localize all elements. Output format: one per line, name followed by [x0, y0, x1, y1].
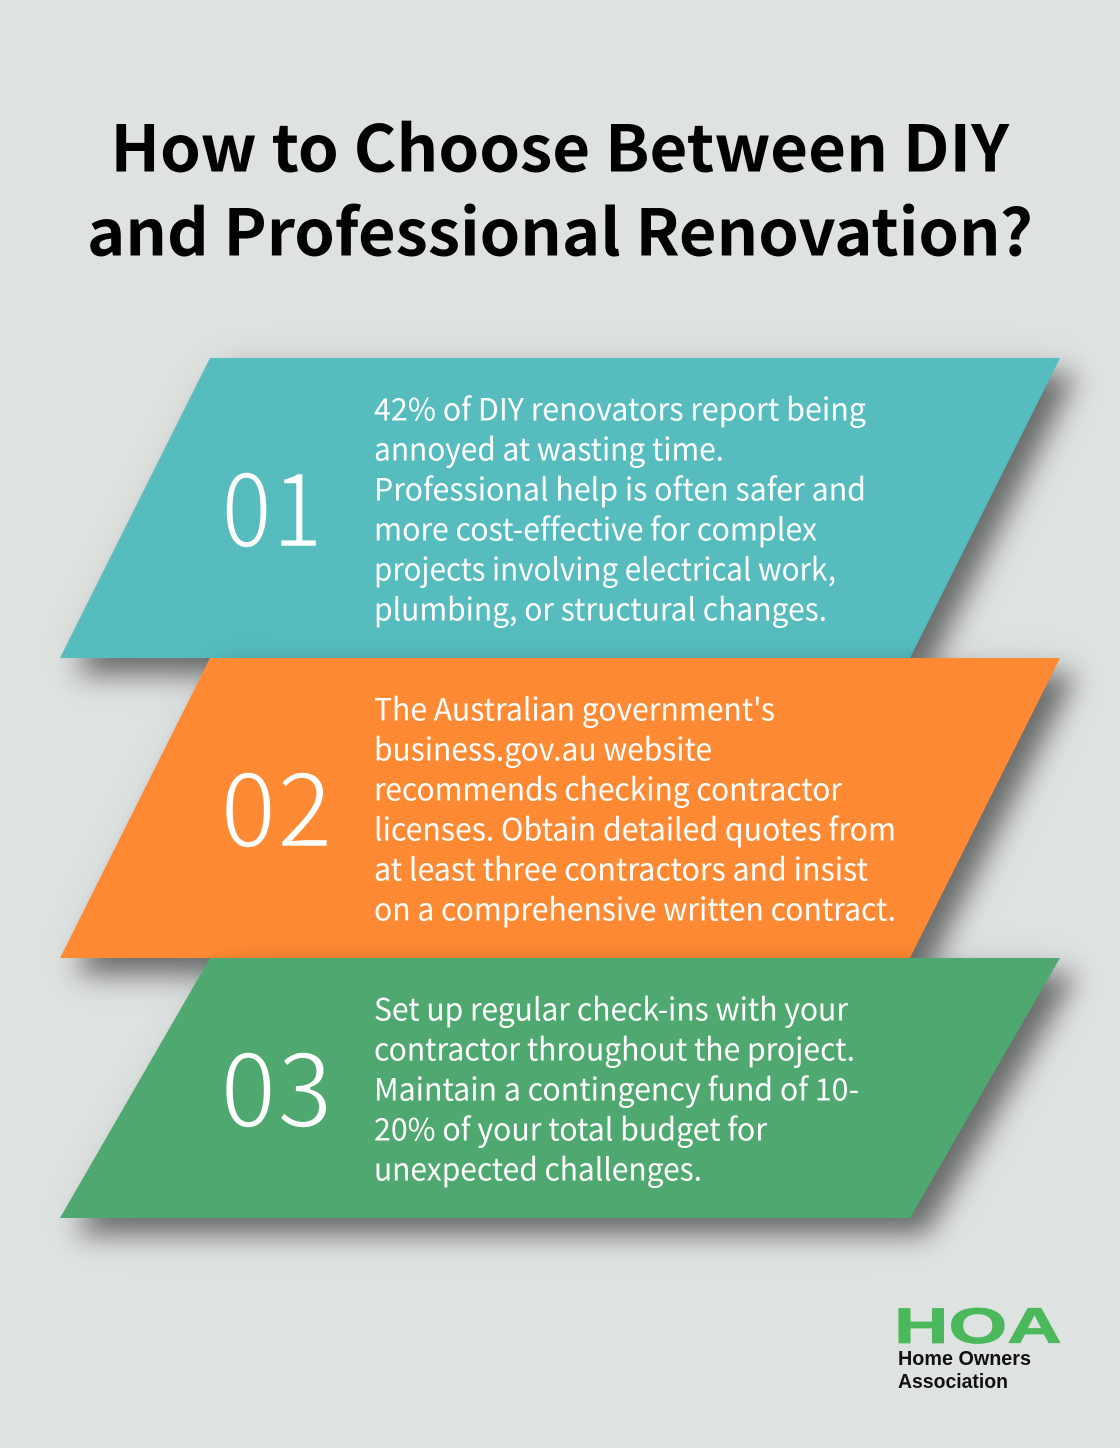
logo: HOA Home Owners Association: Home Owners [898, 1348, 1031, 1370]
logo: HOA Home Owners Association: HOA [894, 1298, 1062, 1354]
text: step 01 body: 42% of DIY renovators report being [374, 384, 867, 430]
title: How to Choose Between DIY [110, 98, 1010, 190]
text: step 02 body: on a comprehensive written contract. [374, 884, 896, 930]
text: step 03 body: Set up regular check-ins with your [374, 984, 849, 1030]
text: step 03 body: Maintain a contingency fund of 10- [374, 1064, 859, 1110]
text: step 02 body: business.gov.au website [374, 724, 712, 770]
text: step 03 body: unexpected challenges. [374, 1144, 702, 1190]
text: step 03 body: 20% of your total budget for [374, 1104, 768, 1150]
text: step 02 body: licenses. Obtain detailed quotes from [374, 804, 896, 850]
logo: HOA Home Owners Association: Association [898, 1371, 1008, 1393]
number 01: 01 [221, 426, 323, 577]
text: step 01 body: more cost-effective for complex [374, 504, 817, 550]
text: step 01 body: projects involving electrical work, [374, 544, 836, 590]
title: and Professional Renovation? [87, 182, 1033, 274]
panel: step 02 [60, 658, 1076, 974]
panel: step 03 [60, 958, 1076, 1234]
text: step 02 body: at least three contractors and insist [374, 844, 868, 890]
text: step 01 body: annoyed at wasting time. [374, 424, 724, 470]
panel: step 01 [60, 358, 1076, 674]
text: step 02 body: The Australian government's [374, 684, 775, 730]
text: step 02 body: recommends checking contractor [374, 764, 843, 810]
title [87, 98, 1033, 274]
text: step 01 body [374, 384, 867, 630]
text: step 02 body [374, 684, 896, 930]
logo: HOA Home Owners Association [894, 1298, 1062, 1393]
number 02: 02 [220, 726, 333, 877]
text: step 01 body: Professional help is often safer and [374, 464, 866, 510]
text: step 01 body: plumbing, or structural changes. [374, 584, 827, 630]
number 03: 03 [220, 1006, 333, 1157]
text: step 03 body [374, 984, 859, 1190]
text: step 03 body: contractor throughout the project. [374, 1024, 855, 1070]
